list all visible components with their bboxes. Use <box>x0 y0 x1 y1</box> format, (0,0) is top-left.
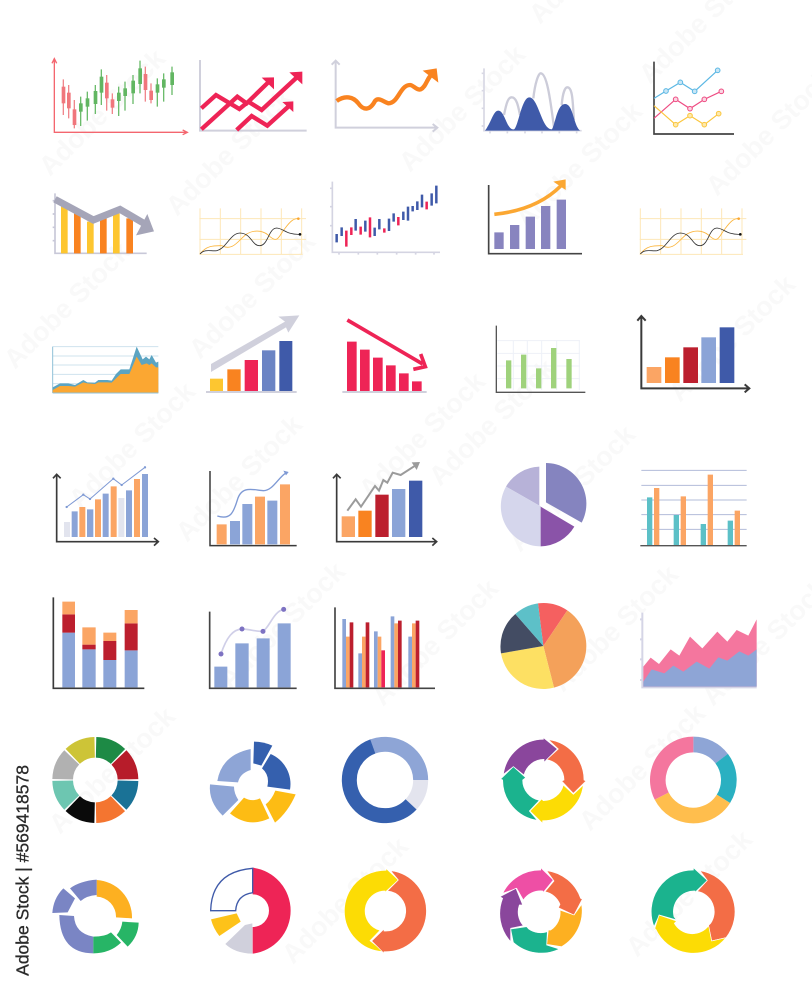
chart: candlestick red and green <box>52 59 187 135</box>
chart: bars with smooth blue curve <box>210 471 297 546</box>
chart: bars with jagged grey arrow <box>333 462 437 546</box>
chart: five coloured bars with arrows <box>637 316 749 392</box>
donut: blue three segment <box>335 730 435 830</box>
arrow ring: five arrows <box>500 868 582 953</box>
text: Adobe Stock <box>0 236 137 374</box>
chart: falling bars with grey arrow <box>53 193 154 253</box>
text: Adobe Stock <box>353 366 492 504</box>
donut: four colour ring <box>644 730 743 830</box>
chart: blue and pink candlesticks <box>330 182 440 255</box>
text: Adobe Stock <box>503 419 642 557</box>
donut: exploded blue and yellow segments <box>210 742 296 823</box>
chart: three rising red arrows <box>200 60 307 131</box>
chart: teal and orange grouped bars <box>640 470 747 546</box>
donut: exploded purple, orange and green <box>52 880 139 953</box>
text: Adobe Stock <box>573 698 712 836</box>
text: Adobe Stock <box>63 376 202 514</box>
chart: rising coloured bars with grey arrow <box>206 315 299 392</box>
donut: red half with outlined segment <box>211 868 291 954</box>
chart: orange and teal area <box>53 347 158 393</box>
chart: eleven bars with trend line <box>53 466 158 546</box>
chart: orange wave arrow <box>332 61 438 132</box>
text: Adobe Stock <box>213 556 352 694</box>
text: Adobe Stock <box>620 824 759 962</box>
text: Adobe Stock <box>393 39 532 177</box>
chart: five slice pie <box>500 603 586 689</box>
text: Adobe Stock <box>546 559 685 697</box>
arrow ring: two arrows <box>344 868 426 953</box>
text: Adobe Stock <box>510 96 649 234</box>
stock id caption: Adobe Stock | #569418578 <box>12 765 32 976</box>
donut: eight colour segments <box>49 734 142 826</box>
text: Adobe Stock <box>663 269 802 407</box>
chart: pink and blue stacked area <box>640 613 757 687</box>
chart: triple grouped bars <box>335 607 435 688</box>
chart: blue mountain area <box>482 68 582 133</box>
text: Adobe Stock <box>43 701 182 839</box>
chart: grid with two curves <box>199 208 306 254</box>
arrow ring: four arrows <box>501 738 586 823</box>
chart: purple bars with rising orange arrow <box>489 179 582 254</box>
chart: four bars with dotted curve <box>210 607 297 688</box>
chart: falling red bars with arrow <box>342 320 427 392</box>
chart: green bars on light grid <box>496 326 585 392</box>
chart: stacked bars <box>53 597 144 688</box>
chart: purple exploded pie <box>501 463 586 546</box>
text: Adobe Stock <box>183 226 322 364</box>
text: Adobe Stock <box>366 573 505 711</box>
arrow ring: three arrows <box>651 868 735 953</box>
chart: grid with two curves (second copy) <box>640 208 746 254</box>
text: Adobe Stock <box>33 43 172 181</box>
text: Adobe Stock <box>170 409 309 547</box>
text: Adobe Stock <box>423 353 562 491</box>
text: Adobe Stock <box>276 831 415 969</box>
chart: three line series with dots <box>654 62 734 134</box>
text: Adobe Stock <box>160 83 299 221</box>
